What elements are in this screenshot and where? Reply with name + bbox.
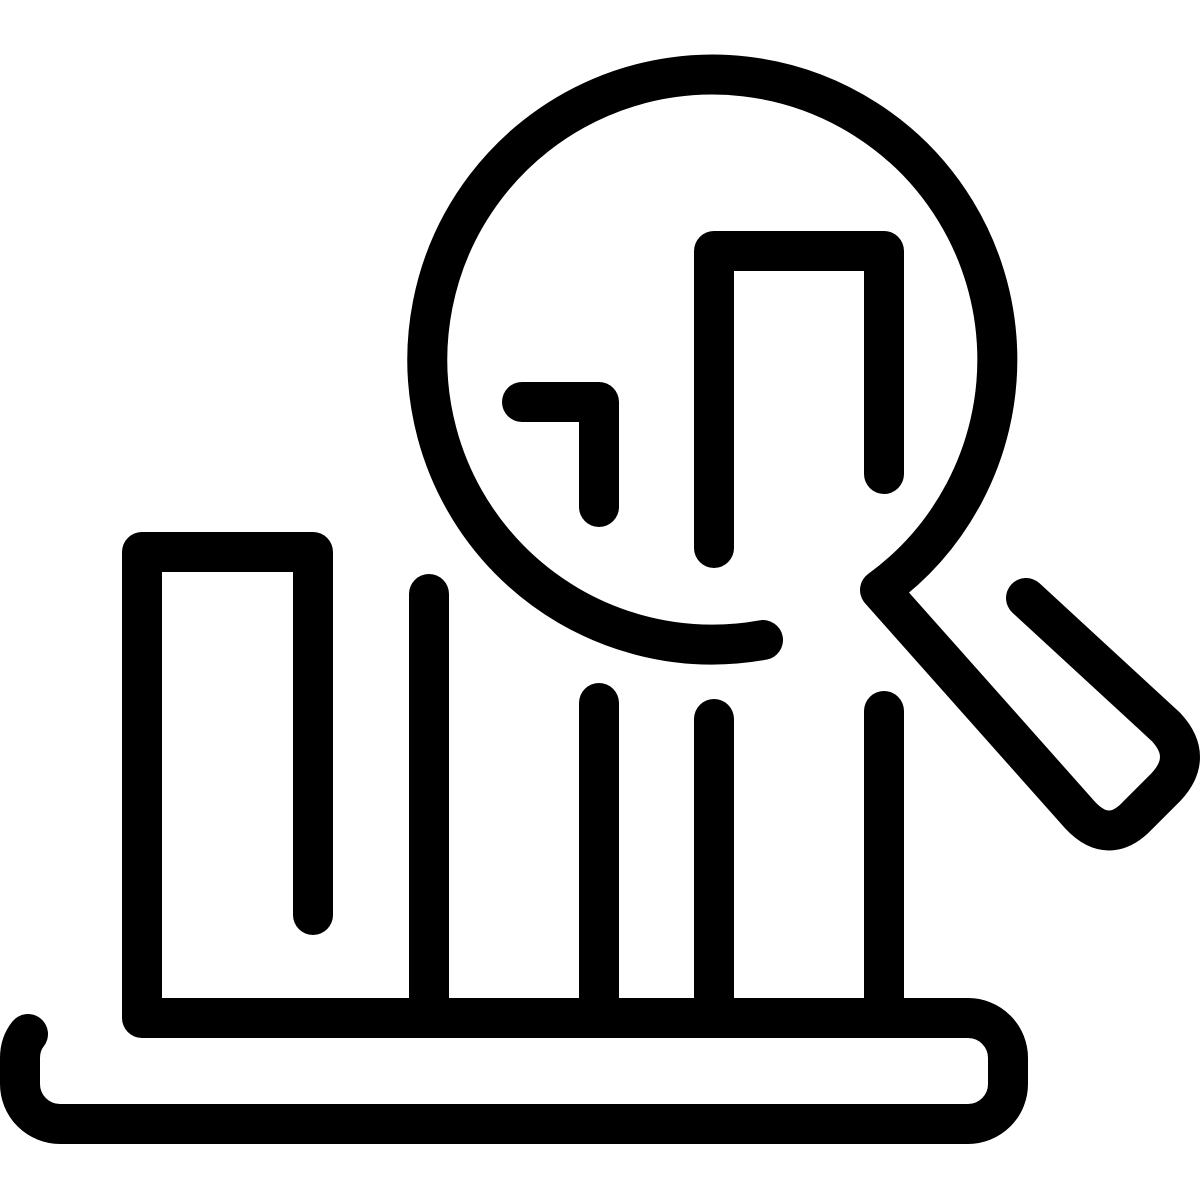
magnifying glass — [427, 75, 1180, 831]
bar lines — [429, 594, 884, 1018]
bars inside magnifier — [522, 251, 884, 548]
left bar and base tray — [20, 552, 1008, 1124]
